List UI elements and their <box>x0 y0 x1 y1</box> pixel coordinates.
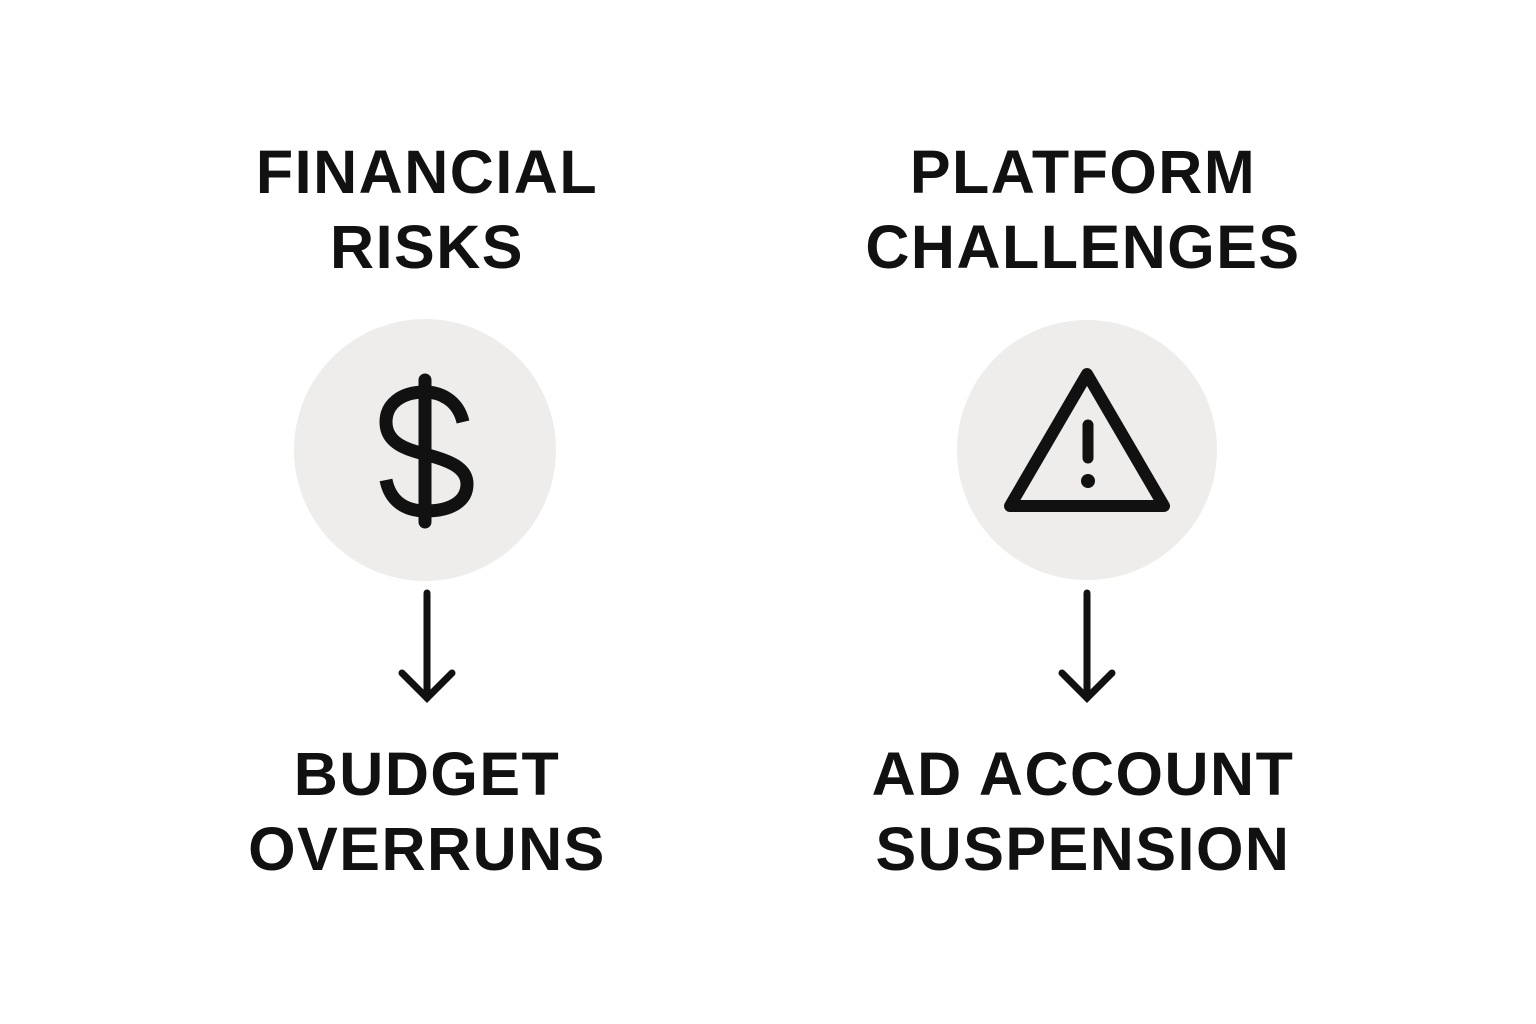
label: budget overruns <box>248 740 606 883</box>
icon: warning circle <box>957 320 1217 580</box>
heading: financial risks <box>256 138 598 281</box>
label: ad account suspension: SUSPENSION <box>876 815 1290 883</box>
label: budget overruns: OVERRUNS <box>248 815 606 883</box>
label: ad account suspension <box>872 740 1294 883</box>
heading: platform challenges <box>865 138 1301 281</box>
label: ad account suspension: AD ACCOUNT <box>872 740 1294 808</box>
heading: financial risks: FINANCIAL <box>256 138 598 206</box>
heading: platform challenges: PLATFORM <box>910 138 1256 206</box>
heading: financial risks: RISKS <box>330 213 524 281</box>
icon: dollar circle <box>294 319 556 581</box>
label: budget overruns: BUDGET <box>294 740 560 808</box>
arrow: left <box>402 593 452 698</box>
arrow: right <box>1062 593 1112 698</box>
heading: platform challenges: CHALLENGES <box>865 213 1301 281</box>
